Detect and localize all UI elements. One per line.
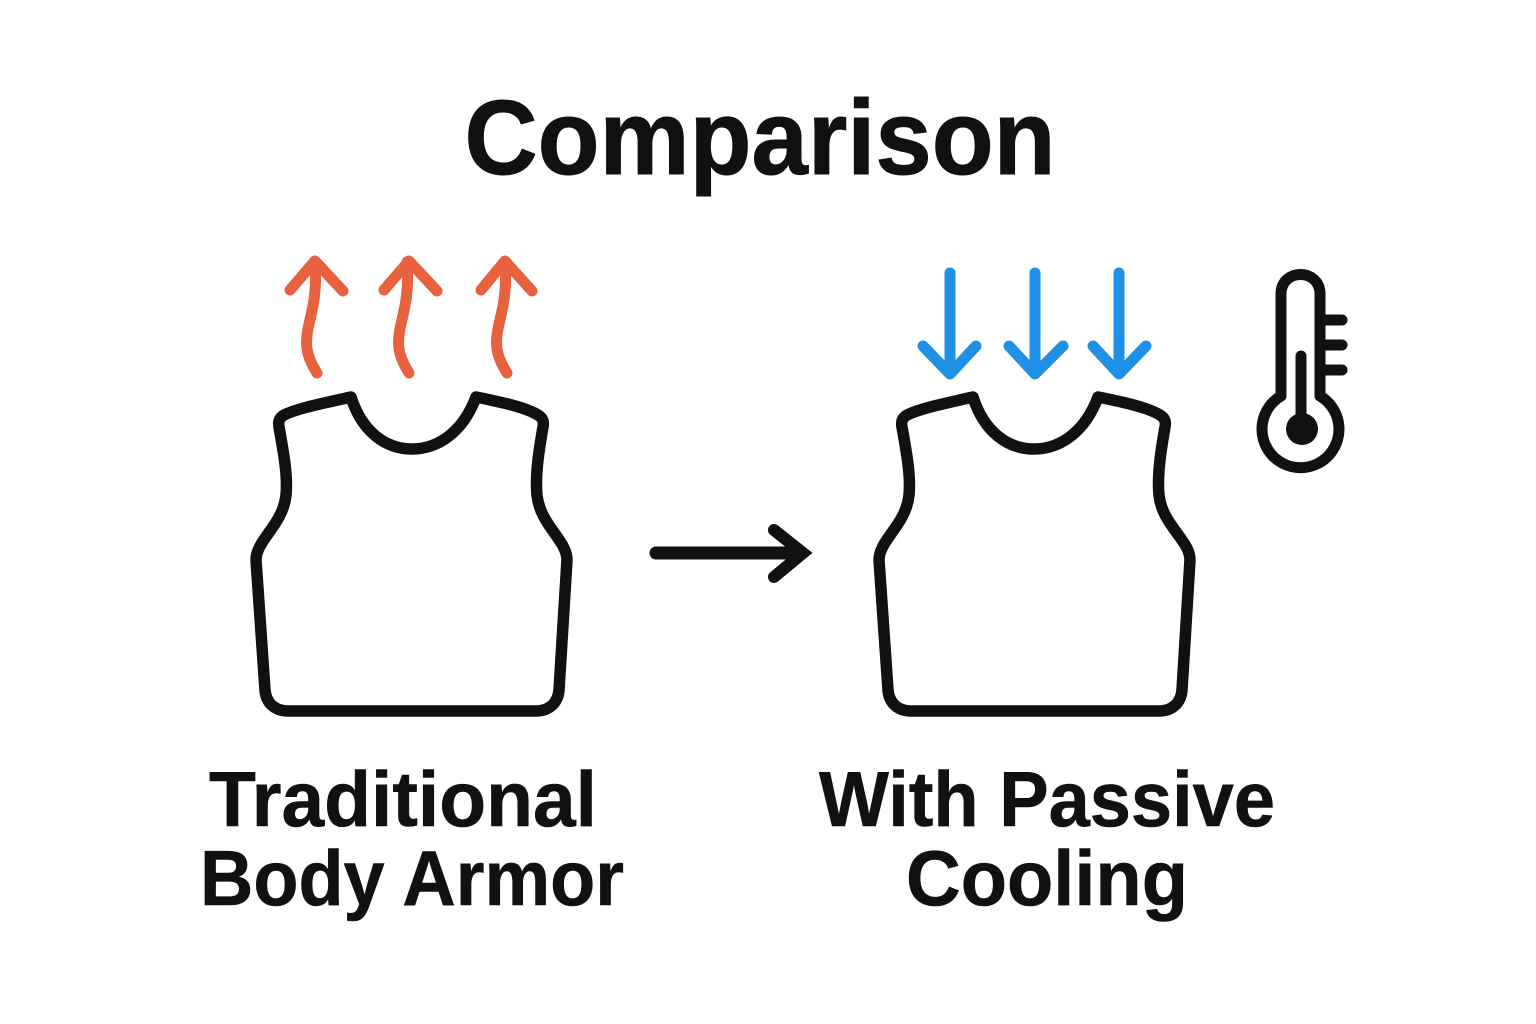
label: traditional body armor: Body Armor — [200, 834, 624, 922]
cooling arrows: passive cooling — [923, 273, 1146, 374]
arrow: transition — [656, 530, 803, 577]
label: with passive cooling — [819, 755, 1275, 922]
vest: traditional body armor — [256, 397, 567, 711]
label: with passive cooling: With Passive — [819, 755, 1275, 843]
title: Comparison — [464, 79, 1056, 197]
label: with passive cooling: Cooling — [906, 834, 1188, 922]
vest: with passive cooling — [879, 397, 1190, 711]
label: traditional body armor: Traditional — [209, 755, 597, 843]
heat arrows: traditional armor — [290, 261, 532, 373]
icon: thermometer — [1262, 274, 1342, 468]
label: traditional body armor — [200, 755, 624, 922]
